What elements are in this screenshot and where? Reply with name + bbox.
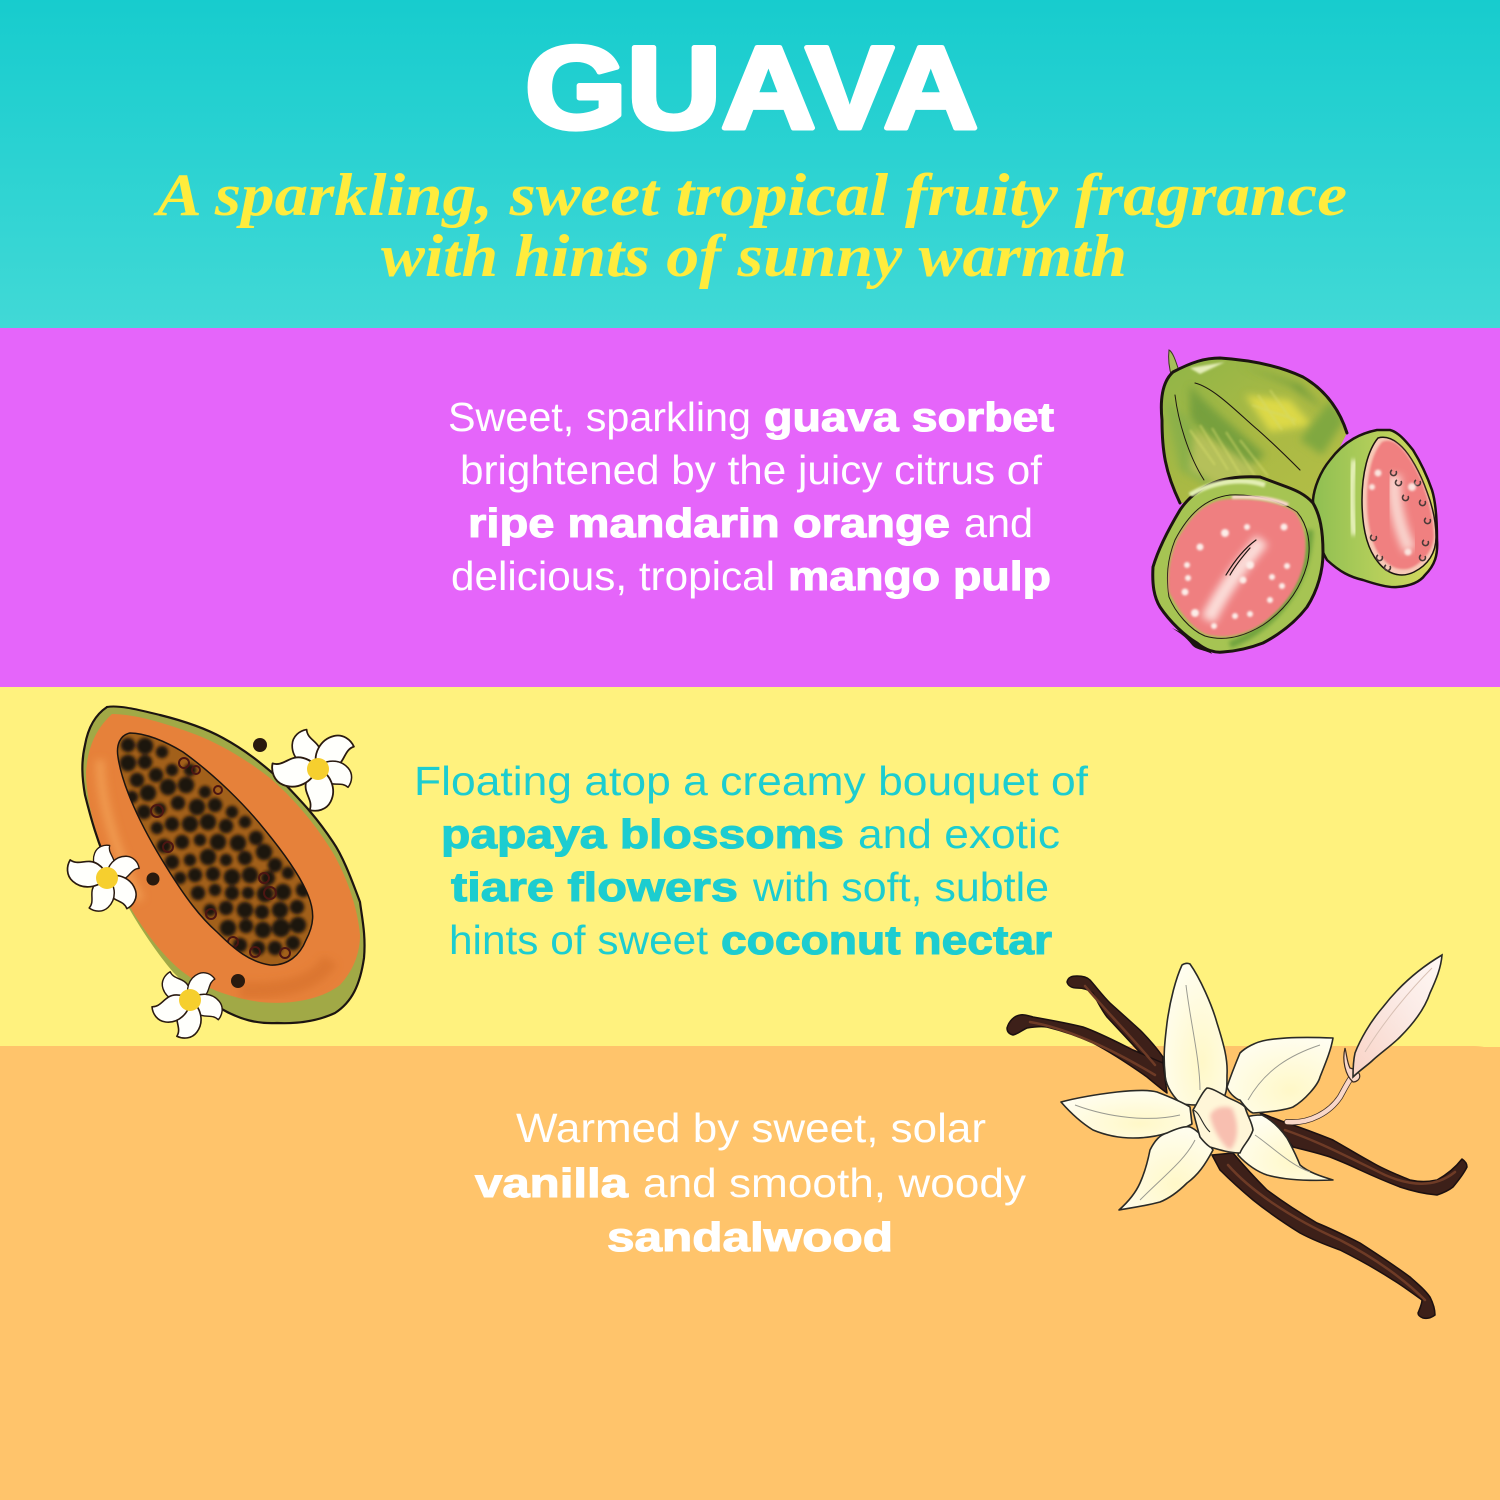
text block: top notes: Sweet, sparkling — [448, 394, 751, 440]
flower bud — [1287, 955, 1442, 1122]
cut guava front — [1153, 477, 1323, 654]
icon: vanilla flower and pods — [1007, 955, 1467, 1318]
flower bottom — [150, 967, 227, 1041]
text block: top notes: guava sorbet — [764, 394, 1054, 440]
subtitle: A sparkling, sweet tropical fruity fragrance — [153, 162, 1347, 228]
panel: heart notes — [0, 687, 1500, 1047]
text block: base notes: and smooth, woody — [643, 1160, 1027, 1206]
text block: base notes: Warmed by sweet, solar — [516, 1105, 986, 1151]
pod highlights — [1030, 986, 1455, 1300]
petal veins — [1075, 985, 1320, 1200]
text block: top notes: ripe mandarin orange — [468, 500, 950, 546]
panel: top notes — [0, 328, 1500, 687]
panel: header — [0, 0, 1500, 328]
text block: heart notes — [414, 758, 1089, 963]
text block: heart notes: Floating atop a creamy bouquet of — [414, 758, 1089, 804]
icon: guava fruits — [1153, 350, 1437, 654]
text block: heart notes: tiare flowers — [451, 864, 738, 910]
papaya seeds — [121, 739, 309, 958]
text block: heart notes: coconut nectar — [721, 917, 1052, 963]
text block: top notes: brightened by the juicy citrus of — [460, 447, 1043, 493]
vanilla pods — [1007, 976, 1467, 1318]
flower left — [64, 845, 143, 915]
text block: heart notes: with soft, subtle — [752, 864, 1049, 910]
text block: top notes: delicious, tropical — [451, 553, 775, 599]
subtitle — [153, 162, 1347, 289]
subtitle: with hints of sunny warmth — [381, 223, 1127, 289]
text block: heart notes: hints of sweet — [449, 917, 709, 963]
papaya fruit — [82, 707, 365, 1023]
flower petals — [1061, 963, 1333, 1210]
icon: papaya with flowers — [64, 707, 365, 1041]
text block: base notes — [475, 1105, 1027, 1260]
text block: top notes: and — [964, 500, 1033, 546]
title: GUAVA — [525, 22, 978, 153]
text block: top notes — [448, 394, 1054, 599]
whole guava — [1161, 350, 1347, 503]
flower top right — [271, 727, 357, 811]
text block: top notes: mango pulp — [788, 553, 1051, 599]
loose seeds — [146, 738, 267, 988]
panel: base notes — [0, 1046, 1500, 1500]
text block: heart notes: papaya blossoms — [441, 811, 844, 857]
text block: base notes: vanilla — [475, 1160, 629, 1206]
text block: heart notes: and exotic — [858, 811, 1060, 857]
cut guava right — [1313, 430, 1437, 587]
text block: base notes: sandalwood — [607, 1214, 893, 1260]
